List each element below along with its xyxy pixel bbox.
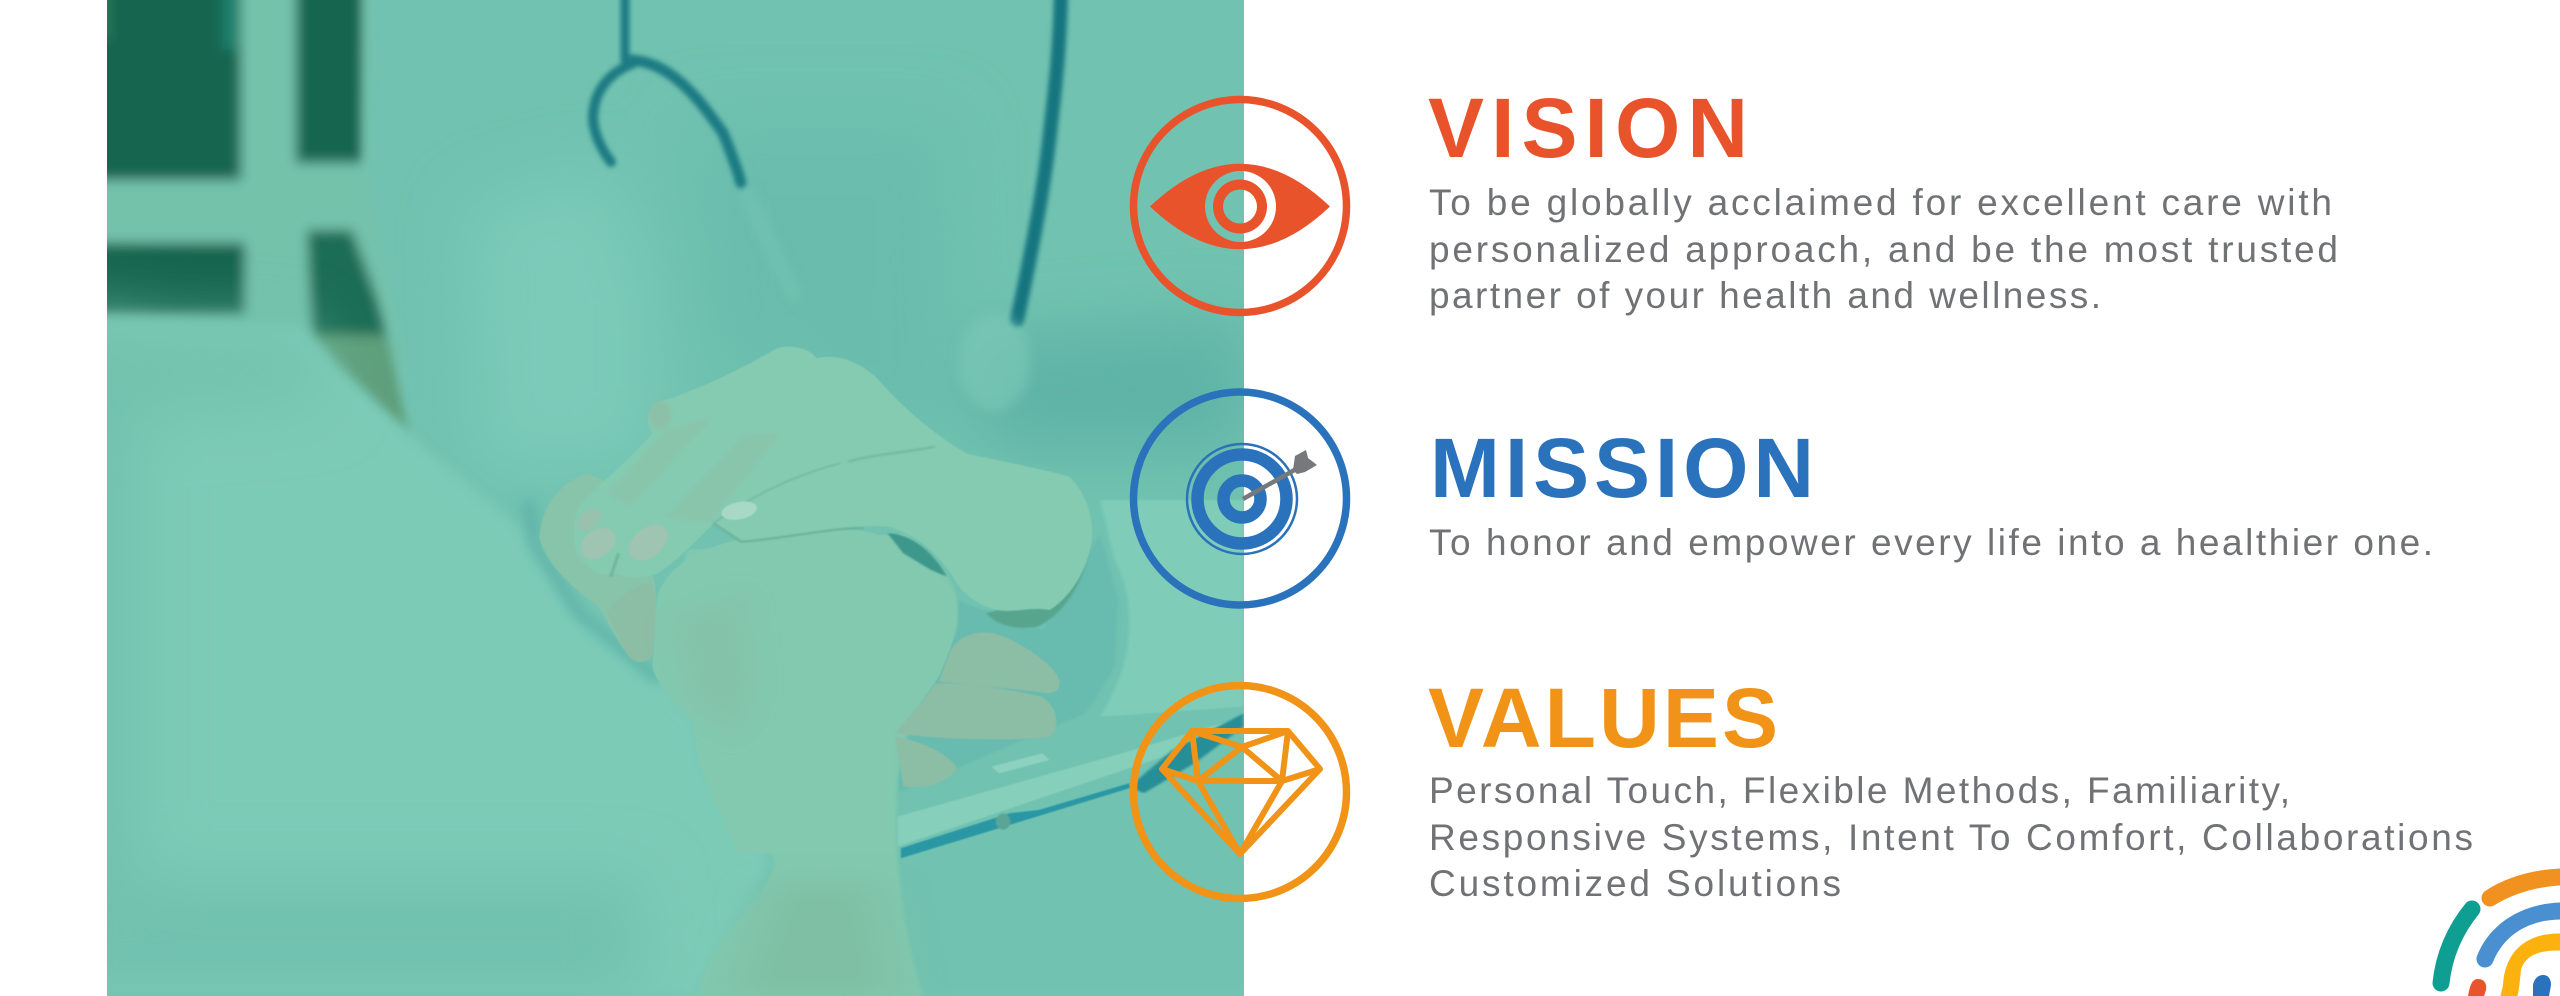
text: vision statement (1429, 182, 2338, 316)
icon: eye in circle (1134, 100, 1346, 312)
panel: values (1134, 671, 2473, 904)
doctor's coat (358, 0, 374, 165)
icon: target with arrow (1134, 392, 1346, 605)
wrist shading (670, 593, 757, 737)
text: values list: Personal Touch, Flexible Methods, Familiarity, (1429, 770, 2290, 811)
panel: vision (1134, 81, 2338, 316)
text: mission statement: To honor and empower every life into a healthier one. (1429, 522, 2433, 563)
window background (107, 0, 411, 430)
text: values list: Responsive Systems, Intent To Comfort, Collaborations (1429, 817, 2473, 858)
patient's wrist (652, 529, 957, 853)
patient's fingers (540, 473, 1060, 787)
clipboard and sleeve (897, 500, 1244, 858)
stethoscope (593, 0, 1061, 320)
coat tonal folds (496, 208, 1244, 458)
logo: fingerprint arcs (2441, 868, 2560, 996)
text: values list: Customized Solutions (1429, 863, 1841, 904)
text: vision statement: partner of your health and wellness. (1429, 275, 2101, 316)
icon: diamond in circle (1134, 686, 1346, 898)
body shadow beside hand (528, 500, 660, 680)
fingernails (576, 501, 758, 561)
text: vision statement: personalized approach, and be the most trusted (1429, 229, 2338, 270)
heading: values: VALUES (1428, 671, 1778, 765)
text: values list (1429, 770, 2473, 904)
photo: doctor holding patient's hand with teal overlay (40, 0, 1300, 996)
heading: mission: MISSION (1430, 421, 1814, 515)
forearm (658, 533, 958, 996)
stethoscope chest piece (964, 314, 1030, 408)
text: vision statement: To be globally acclaimed for excellent care with (1429, 182, 2332, 223)
cuff shadow and gap (887, 533, 1089, 628)
doctor's hand (574, 347, 1092, 611)
heading: vision: VISION (1428, 81, 1748, 175)
hands (540, 347, 1092, 853)
panel: mission (1134, 392, 2433, 605)
knuckles and finger shading (648, 400, 670, 427)
body tonal shading (107, 280, 624, 983)
patient's body (107, 316, 766, 872)
